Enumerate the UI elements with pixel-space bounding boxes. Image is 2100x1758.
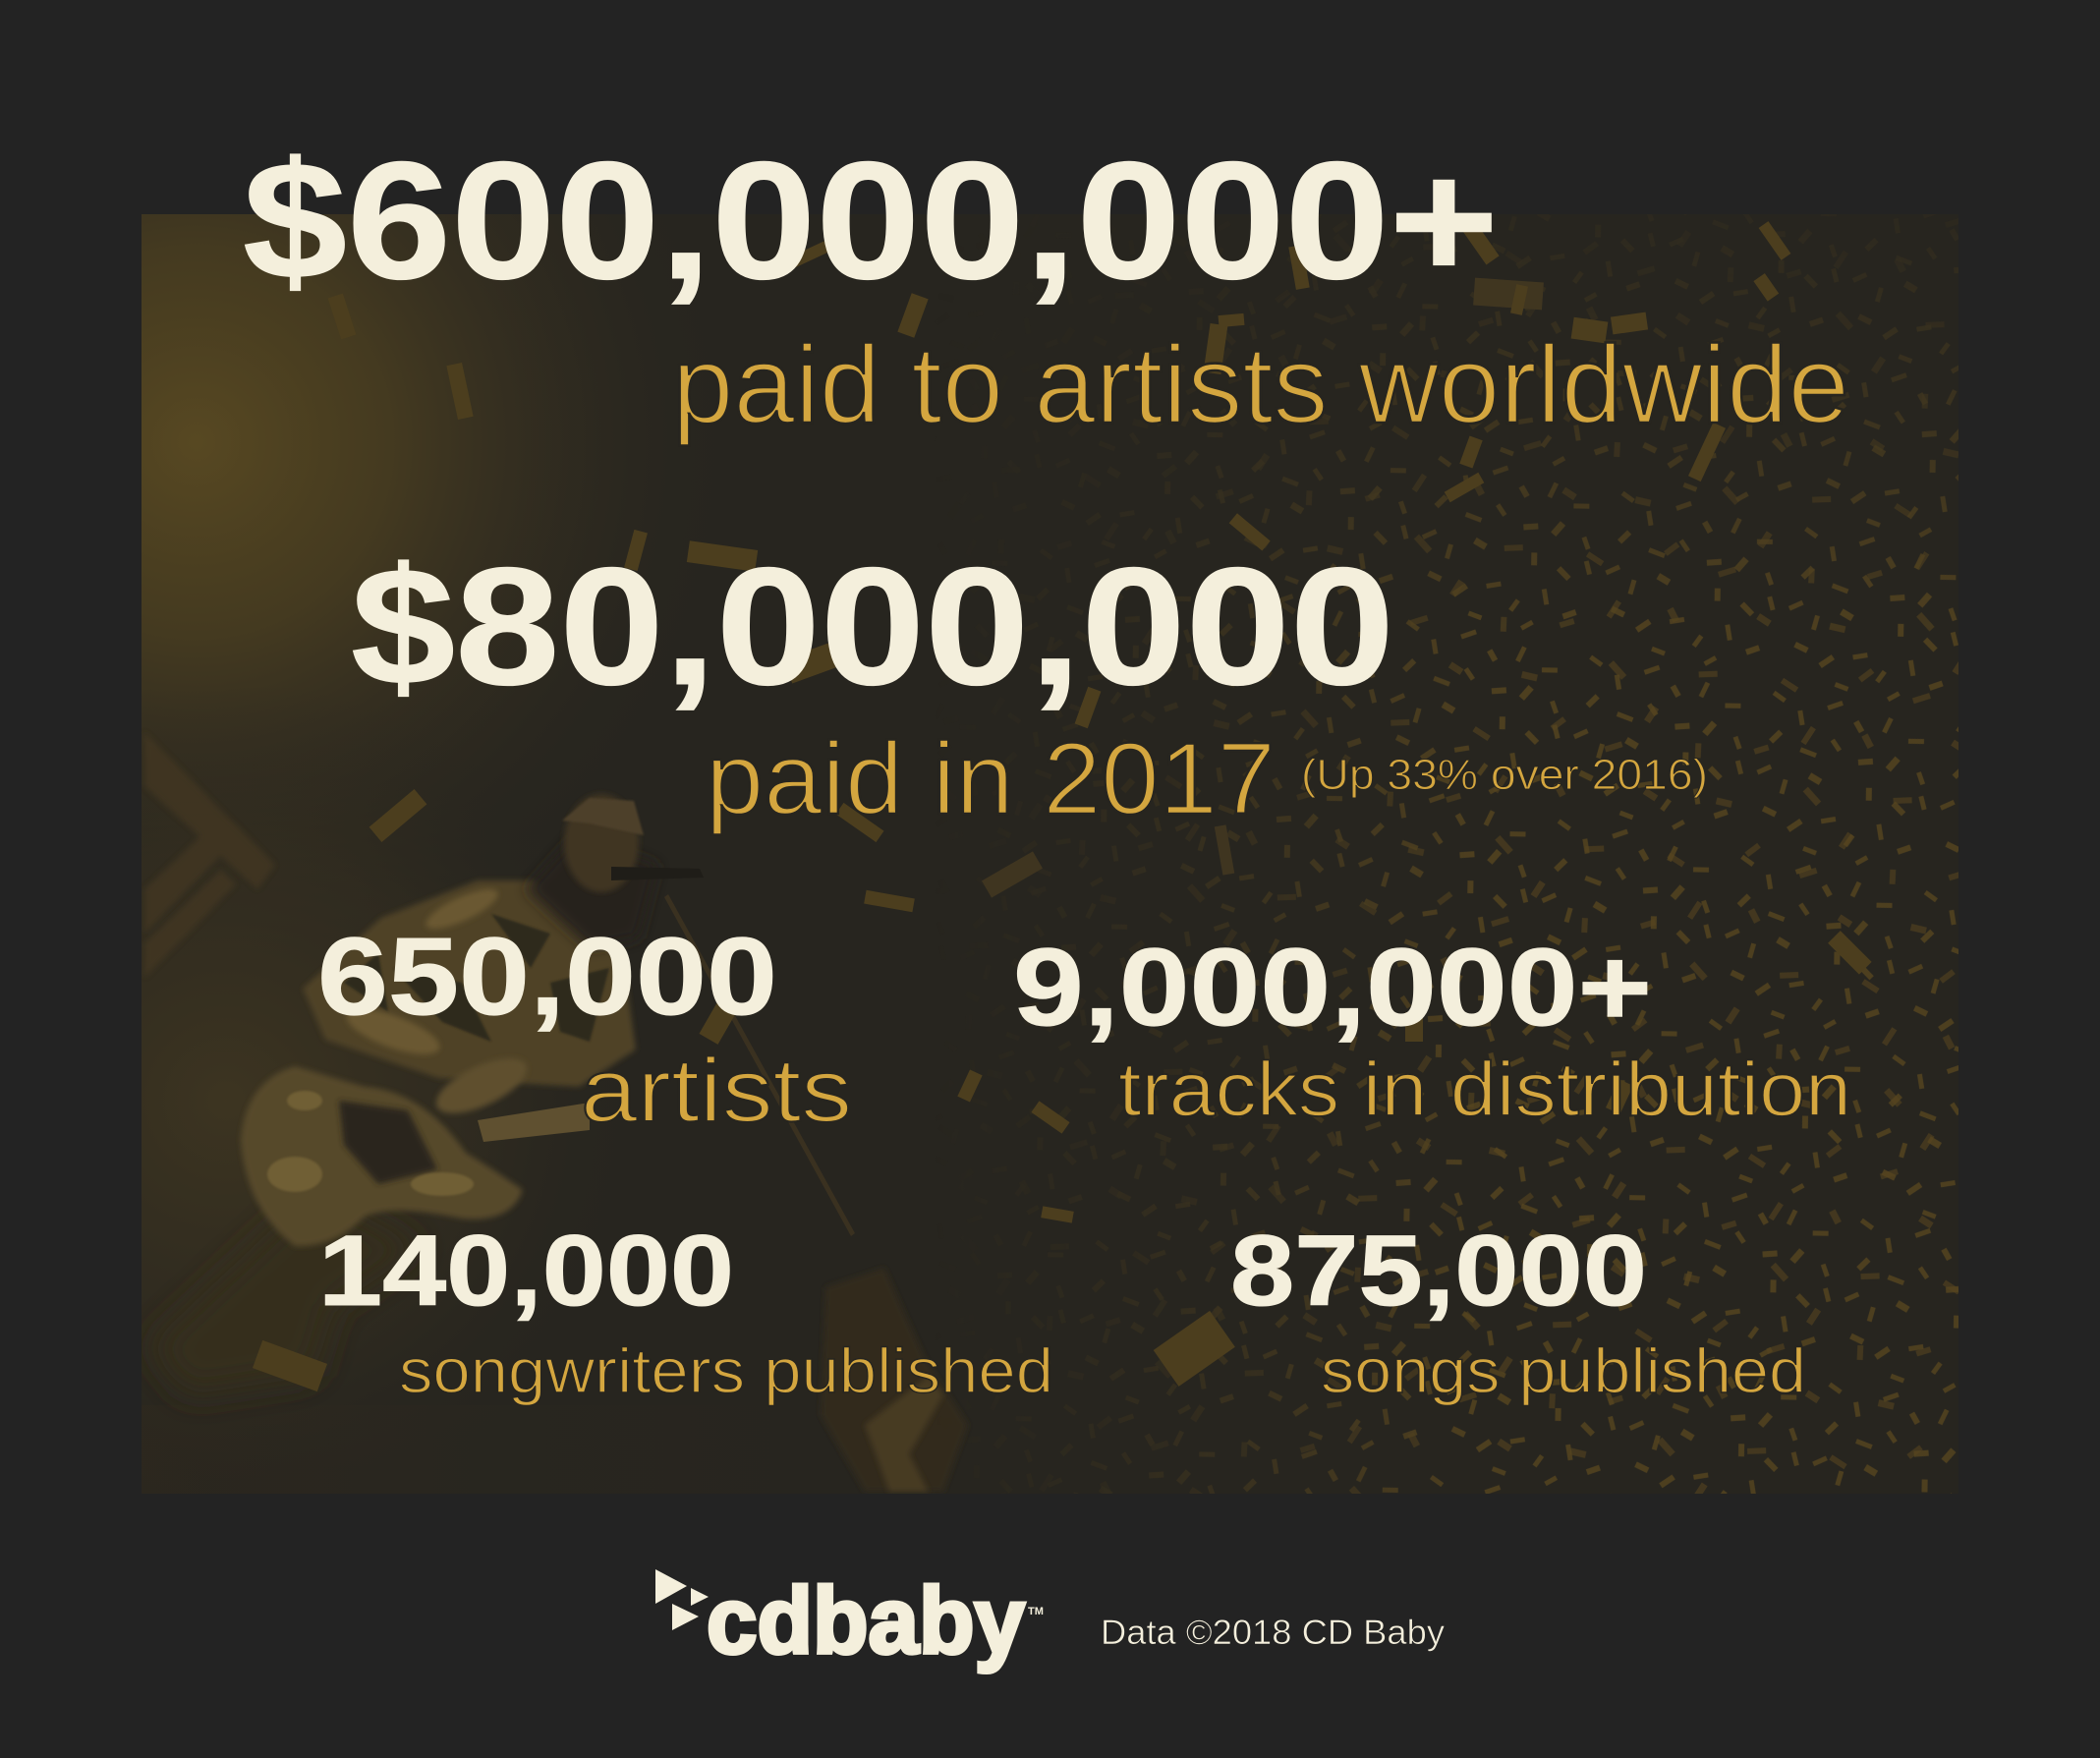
- stat: songwriters: [318, 1215, 1053, 1406]
- number: 650,000: 650,000: [317, 915, 777, 1038]
- number: $600,000,000+: $600,000,000+: [243, 128, 1499, 314]
- icon: play triangles: [655, 1569, 709, 1630]
- caption: artists: artists: [581, 1041, 852, 1141]
- number: 140,000: 140,000: [318, 1215, 734, 1327]
- microphone stand: [664, 894, 855, 1236]
- guitar light specks: [267, 1091, 474, 1196]
- guitar dark detail: [339, 1101, 437, 1184]
- musician cap: [562, 798, 644, 835]
- musician legs shadow: [188, 1358, 254, 1377]
- musician hand: [434, 1059, 527, 1116]
- number: 9,000,000+: 9,000,000+: [1013, 926, 1652, 1049]
- floor band: [142, 1405, 987, 1494]
- caption: paid to artists worldwide: paid to artists worldwide: [672, 323, 1849, 446]
- stat: total paid: [243, 128, 1849, 446]
- musician torso: [303, 880, 636, 1087]
- caption: tracks in distribution: tracks in distribution: [1118, 1046, 1851, 1132]
- guitar body: [241, 1066, 523, 1246]
- stage structure at left: [144, 732, 275, 978]
- microphone: [611, 867, 704, 880]
- caption: songwriters published: songwriters published: [399, 1335, 1053, 1406]
- caption: paid in 2017: paid in 2017: [706, 722, 1276, 836]
- second guitar: [865, 1376, 943, 1492]
- infographic canvas: [142, 153, 1958, 1674]
- dense confetti on right: [1101, 238, 1958, 1494]
- stat: songs: [1230, 1215, 1806, 1406]
- stat: paid in 2017: [351, 534, 1708, 836]
- note: up 33%: (Up 33% over 2016): [1301, 751, 1708, 799]
- panel: concert photo: [142, 211, 1958, 1494]
- torso creases: [344, 914, 609, 1042]
- musician head: [564, 794, 639, 892]
- torso highlights: [346, 888, 498, 1055]
- logo: cd baby: [655, 1568, 1044, 1673]
- credit: data copyright: Data ©2018 CD Baby: [1101, 1614, 1446, 1652]
- stat: artists: [317, 915, 852, 1141]
- number: 875,000: 875,000: [1230, 1215, 1647, 1327]
- musician hair and shadow: [522, 879, 605, 952]
- trademark: TM: [1028, 1606, 1044, 1617]
- logo wordmark: cdbaby: [707, 1568, 1025, 1673]
- number: $80,000,000: $80,000,000: [351, 534, 1394, 720]
- musician with guitar: [147, 794, 968, 1492]
- second musician: [821, 1268, 968, 1492]
- guitar neck: [478, 1103, 590, 1142]
- stat: tracks: [1013, 926, 1851, 1132]
- large confetti pieces: [253, 211, 1872, 1391]
- caption: songs published: songs published: [1321, 1335, 1806, 1406]
